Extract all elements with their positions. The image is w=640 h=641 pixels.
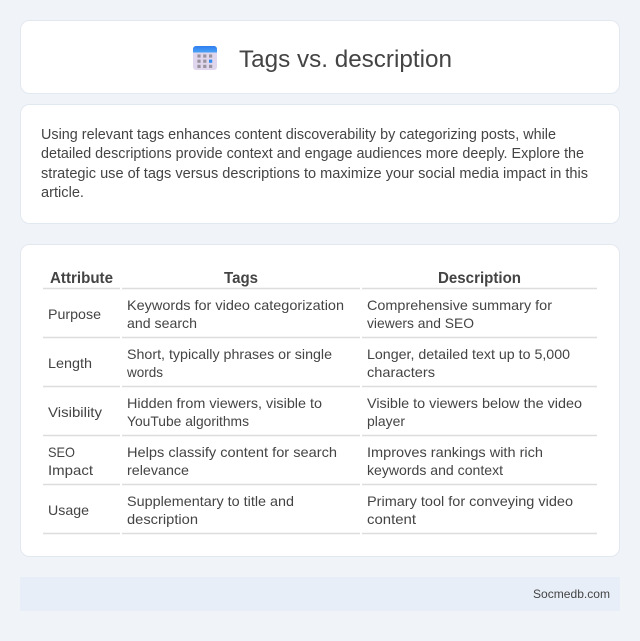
row: Length: Short, typically phrases or single	[127, 346, 332, 362]
row: Purpose: Keywords for video categorization	[127, 297, 344, 313]
row: Visibility	[48, 395, 582, 429]
icon: calendar	[193, 46, 217, 70]
table header row: Description	[438, 270, 521, 287]
row: Purpose	[48, 297, 552, 331]
table header row	[50, 270, 521, 287]
row: SEO Impact	[48, 444, 543, 478]
row: Visibility: player	[367, 413, 405, 429]
intro paragraph	[41, 127, 588, 201]
row: Usage	[48, 493, 573, 527]
table header row: Tags	[224, 270, 258, 287]
intro paragraph: article.	[41, 185, 84, 201]
row: Usage: Usage	[48, 502, 89, 518]
row: SEO Impact: relevance	[127, 462, 189, 478]
row: SEO Impact: SEO	[48, 444, 75, 460]
row: Purpose: Purpose	[48, 306, 101, 322]
row: Visibility: YouTube algorithms	[127, 413, 249, 429]
intro paragraph: detailed descriptions provide context and engage audiences more deeply. Explore the	[41, 146, 584, 162]
panel: comparison table card	[20, 244, 620, 556]
row: Visibility: Visibility	[48, 404, 102, 420]
row: Length: Length	[48, 355, 92, 371]
footer brand text: Socmedb.com	[533, 587, 610, 601]
intro paragraph: strategic use of tags versus descriptions to maximize your social media impact in this	[41, 166, 588, 182]
row: Purpose: and search	[127, 315, 197, 331]
row: Visibility: Hidden from viewers, visible to	[127, 395, 322, 411]
row: Usage: description	[127, 511, 198, 527]
row: Usage: content	[367, 511, 416, 527]
row: Length	[48, 346, 570, 380]
row: Usage: Primary tool for conveying video	[367, 493, 573, 509]
row: SEO Impact: keywords and context	[367, 462, 503, 478]
row: Purpose: viewers and SEO	[367, 315, 474, 331]
footer bar	[20, 577, 620, 611]
row: SEO Impact: Impact	[48, 462, 93, 478]
table header row: Attribute	[50, 270, 113, 287]
intro paragraph: Using relevant tags enhances content discoverability by categorizing posts, while	[41, 127, 556, 143]
row: SEO Impact: Improves rankings with rich	[367, 444, 543, 460]
row: Purpose: Comprehensive summary for	[367, 297, 552, 313]
panel: intro text card	[20, 104, 620, 224]
row: Visibility: Visible to viewers below the video	[367, 395, 582, 411]
row: Length: words	[126, 364, 163, 380]
row: Usage: Supplementary to title and	[127, 493, 294, 509]
row: Length: characters	[367, 364, 435, 380]
row: Length: Longer, detailed text up to 5,000	[367, 346, 570, 362]
panel: header card	[20, 20, 620, 94]
title: Tags vs. description	[239, 46, 452, 73]
row: SEO Impact: Helps classify content for search	[127, 444, 337, 460]
